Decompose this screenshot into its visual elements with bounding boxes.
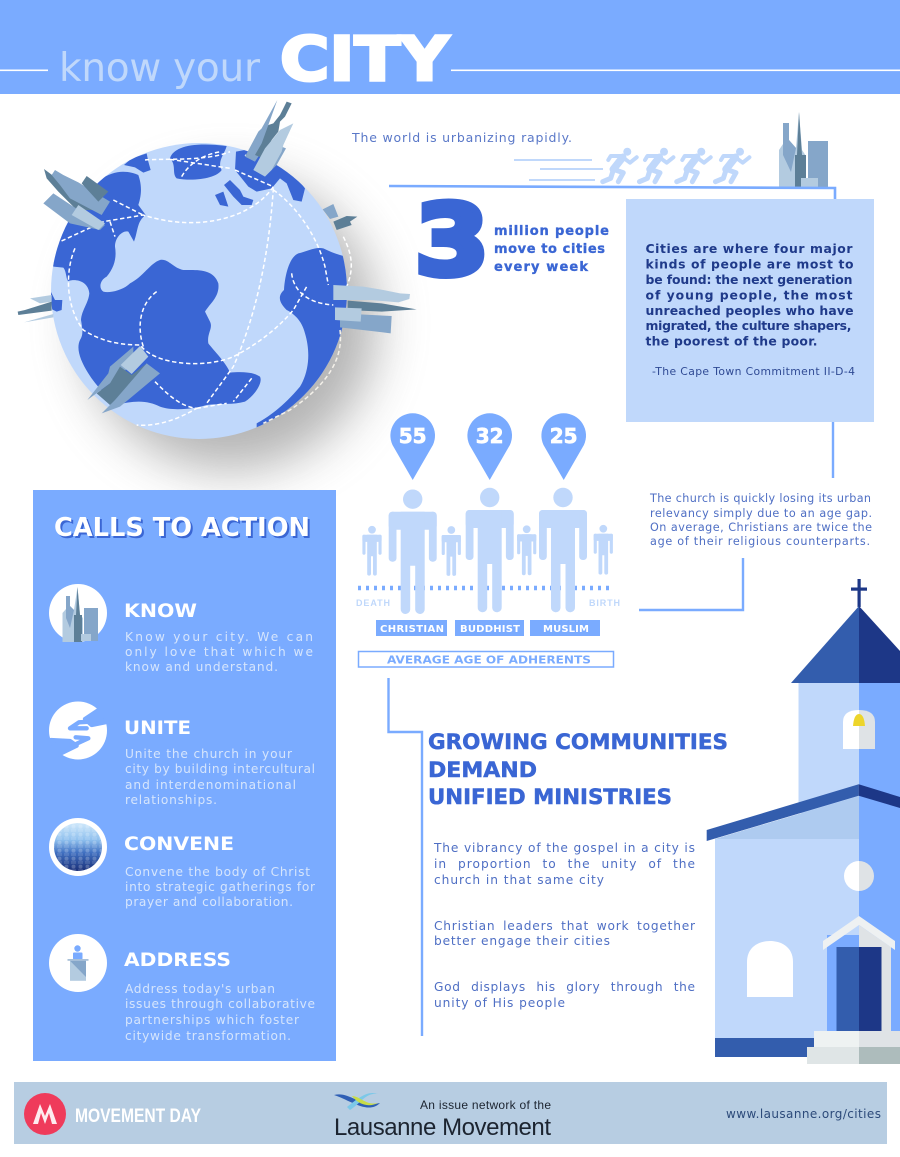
connector: age text to chart [639, 558, 743, 610]
pin: 55 christian: 55 [399, 424, 427, 448]
age gap paragraph: The church is quickly losing its urban [649, 492, 871, 505]
logo: lausanne movement: An issue network of the [420, 1098, 551, 1112]
connector: quote to age text [832, 422, 834, 478]
action: address: citywide transformation. [125, 1029, 291, 1043]
action: unite: and interdenominational [125, 778, 296, 792]
panel: quote: be found: the next generation [646, 272, 852, 287]
logo: lausanne movement [334, 1093, 551, 1141]
logo: movement day: MOVEMENT DAY [75, 1106, 201, 1127]
action: unite: UNITE [124, 717, 191, 739]
action: address [124, 949, 315, 1043]
footer [14, 1082, 887, 1144]
panel: quote: -The Cape Town Commitment II-D-4 [652, 365, 855, 378]
chart caption: AVERAGE AGE OF ADHERENTS [387, 654, 591, 666]
action: unite [124, 717, 315, 807]
age gap paragraph: relevancy simply due to an age gap. [650, 507, 872, 520]
pin: 55 christian [390, 413, 435, 480]
connector: chart to ministries [388, 678, 422, 1036]
ministries text: Christian leaders that work together [434, 919, 696, 933]
religion labels: CHRISTIAN [380, 624, 444, 635]
action: convene [124, 833, 316, 909]
religion labels: MUSLIM [543, 624, 589, 635]
stat: 3 million people: million people [494, 224, 609, 239]
ministries text [433, 841, 696, 1010]
panel: quote: unreached peoples who have [646, 303, 854, 318]
icon: know [49, 584, 107, 642]
action: know: only love that which we [125, 645, 313, 659]
panel: quote: Cities are where four major [646, 241, 853, 256]
panel: quote: of young people, the most [646, 288, 853, 302]
stat: 3 million people: 3 [415, 184, 489, 297]
age gap paragraph: age of their religious counterparts. [650, 535, 870, 548]
pin: 32 buddhist: 32 [476, 424, 504, 448]
panel: quote [626, 199, 874, 422]
icon: convene [49, 818, 107, 876]
pin: 25 muslim [541, 413, 586, 480]
action: address: partnerships which foster [125, 1013, 300, 1027]
ministries text: church in that same city [434, 873, 604, 887]
header banner: CITY [280, 24, 450, 95]
action: know: know and understand. [125, 660, 278, 674]
axis labels: DEATH [356, 598, 390, 608]
chart caption [358, 652, 614, 667]
runners with speed lines [514, 148, 749, 182]
action: address: ADDRESS [124, 949, 231, 971]
panel: quote: the poorest of the poor. [646, 334, 818, 348]
action: know [124, 600, 313, 674]
action: know: KNOW [124, 600, 197, 622]
action: convene: prayer and collaboration. [125, 895, 293, 909]
stat: 3 million people [415, 184, 609, 297]
intro sentence: The world is urbanizing rapidly. [351, 130, 572, 145]
panel title: CALLS TO ACTION [54, 513, 310, 543]
action: convene: CONVENE [124, 833, 234, 855]
action: unite: Unite the church in your [125, 747, 293, 761]
connector: top line to quote [389, 186, 835, 199]
ministries text: in proportion to the unity of the [434, 857, 695, 871]
logo: movement day [24, 1093, 201, 1135]
panel: calls to action [33, 490, 336, 1061]
action: convene: into strategic gatherings for [125, 880, 316, 894]
icon: address [49, 934, 107, 992]
ministries text: The vibrancy of the gospel in a city is [433, 841, 695, 855]
action: address: Address today's urban [125, 982, 275, 996]
globe with cities and routes [18, 100, 417, 470]
chart: average age of adherents [356, 413, 620, 667]
pin: 32 buddhist [467, 413, 512, 480]
religion labels: BUDDHIST [460, 624, 520, 635]
website: www.lausanne.org/cities [726, 1107, 881, 1121]
axis labels [356, 598, 620, 608]
ministries text: better engage their cities [434, 934, 610, 948]
people figures [362, 488, 613, 614]
panel: quote: kinds of people are most to [646, 256, 854, 272]
header banner [0, 0, 900, 95]
action: convene: Convene the body of Christ [125, 865, 310, 879]
action: unite: city by building intercultural [125, 762, 315, 776]
stat: 3 million people: every week [494, 260, 588, 275]
heading: growing communities: DEMAND [428, 758, 537, 782]
ministries text: God displays his glory through the [434, 980, 695, 994]
city skyline icon [779, 112, 828, 187]
logo: lausanne movement: Lausanne Movement [334, 1114, 551, 1141]
heading: growing communities [428, 730, 728, 809]
age gap paragraph [649, 492, 872, 548]
ministries text: unity of His people [434, 996, 565, 1010]
church illustration [707, 579, 900, 1064]
panel: quote: migrated, the culture shapers, [646, 318, 852, 333]
pin: 25 muslim: 25 [550, 424, 578, 448]
panel title: CALLS TO ACTION [56, 515, 312, 545]
icon: unite [49, 702, 108, 760]
axis labels: BIRTH [589, 598, 620, 608]
action: know: Know your city. We can [125, 630, 313, 644]
heading: growing communities: GROWING COMMUNITIES [428, 730, 728, 754]
heading: growing communities: UNIFIED MINISTRIES [428, 785, 672, 809]
age gap paragraph: On average, Christians are twice the [650, 521, 872, 534]
header banner: know your [59, 46, 261, 91]
action: unite: relationships. [125, 793, 217, 807]
stat: 3 million people: move to cities [494, 242, 605, 257]
action: address: issues through collaborative [125, 997, 315, 1011]
religion labels [376, 620, 600, 636]
